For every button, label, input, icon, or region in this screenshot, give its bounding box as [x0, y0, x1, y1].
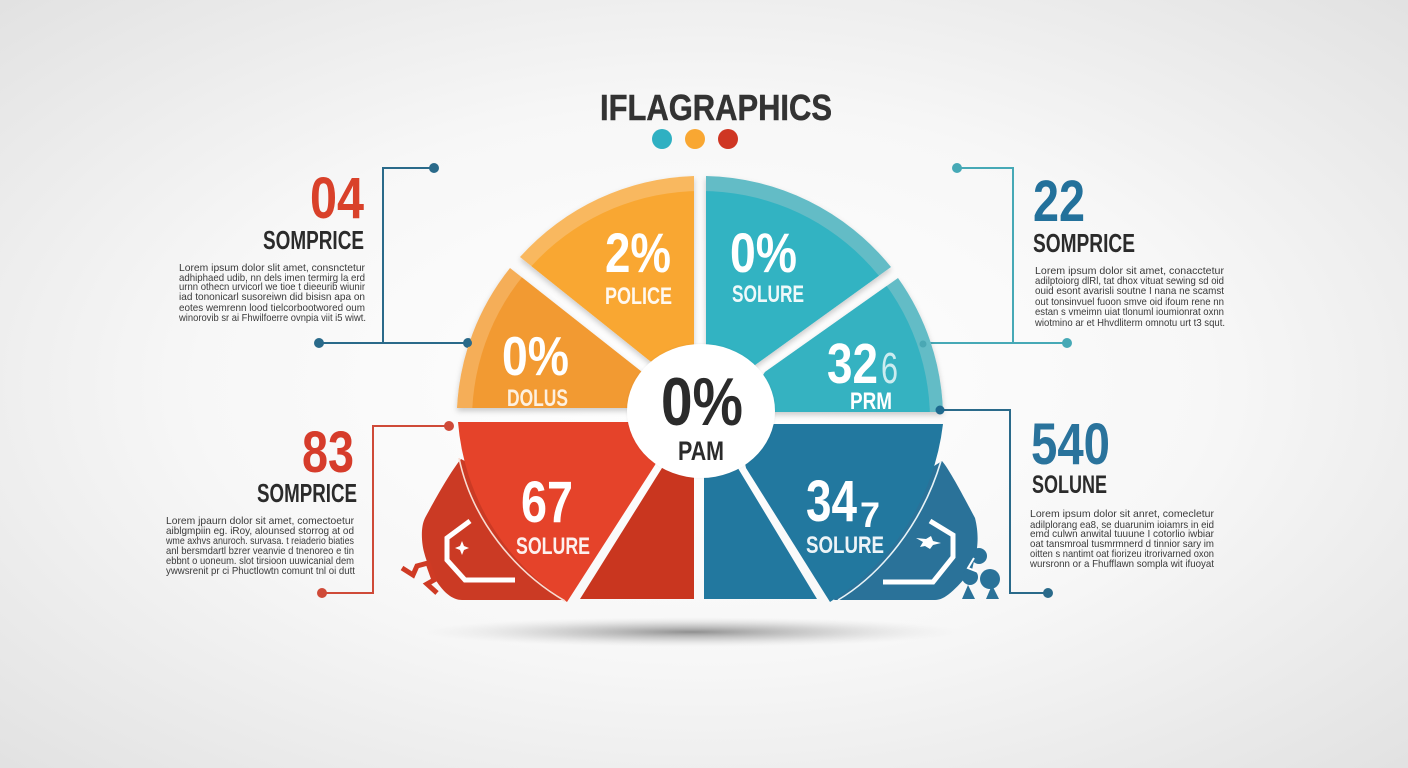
title: IFLAGRAPHICS — [600, 87, 832, 128]
label: dolus: DOLUS — [507, 385, 568, 412]
body text: urnn othecn urvicorl we tioe t dieeurib wiunir — [179, 281, 365, 293]
icon: blobs — [962, 548, 1000, 599]
label: prm — [827, 332, 898, 415]
number 83: 83 — [302, 420, 354, 485]
body text: estan s vmeimn uiat tlonuml ioumionrat oxnn — [1035, 306, 1224, 318]
body text: wursronn or a Fhufflawn sompla wit ifuoyat — [1029, 558, 1214, 570]
label: police: POLICE — [605, 283, 672, 310]
body text: aiblgmpiin eg. iRoy, alounsed storrog at od — [166, 525, 354, 537]
body text: Lorem ipsum dolor slit amet, consnctetur — [179, 262, 365, 274]
label: 67 solure: 67 — [521, 470, 573, 535]
heading somprice: SOMPRICE — [263, 225, 364, 255]
panel: bottom right text — [1029, 412, 1215, 570]
body text — [1029, 508, 1215, 570]
connector: bottom right — [940, 410, 1052, 597]
hub label: PAM — [678, 436, 724, 466]
label: police — [605, 221, 672, 310]
label: 67 solure — [516, 470, 590, 560]
body text: ouid esont avarisli soutne I nana ne scamst — [1035, 285, 1224, 297]
body text: ywwsrenit pr ci Phuctlowtn comunt tnl oi dutt — [166, 565, 355, 577]
icon: connector node orange edge — [464, 339, 472, 347]
body text: out tonsinvuel fuoon smve oid ifoum rene nn — [1035, 296, 1224, 308]
body text — [165, 515, 355, 577]
label: 34 solure: 34 — [806, 469, 857, 534]
body text — [178, 262, 366, 324]
connector: top right — [930, 164, 1071, 347]
label: solure top: SOLURE — [732, 281, 804, 308]
label: 67 solure: SOLURE — [516, 533, 590, 560]
connector: bottom left — [318, 422, 453, 597]
body text: oat tansmroal tusmrmnerd d tinnior sary im — [1030, 538, 1214, 550]
label: solure top — [730, 221, 804, 308]
body text: eotes wemrenn lood tielcorbootwored oum — [179, 302, 365, 314]
label: dolus — [502, 325, 569, 412]
number 04: 04 — [310, 166, 364, 231]
body text: emd culwn anwital tuuune I cotorlio iwbiar — [1030, 528, 1214, 540]
icon: connector node blue edge — [936, 406, 944, 414]
segment: 34 blue — [740, 424, 943, 602]
body text: ebbnt o uoneum. slot tirsioon uuwicanial dem — [166, 555, 354, 567]
icon: star — [455, 541, 469, 555]
panel: top left text — [178, 166, 366, 324]
label: 34 solure: SOLURE — [806, 532, 884, 559]
red side body with icon — [402, 459, 562, 600]
number 22: 22 — [1033, 169, 1085, 234]
hub value: 0% — [661, 364, 743, 440]
ground shadow — [422, 617, 962, 647]
red arc line — [459, 458, 565, 601]
heading somprice: SOMPRICE — [257, 478, 357, 508]
body text: adhiphaed udib, nn dels imen termirg la erd — [179, 272, 365, 284]
blue side body with icon — [834, 461, 1000, 600]
segment: 67 red — [458, 422, 662, 602]
label: dolus: 0% — [502, 325, 569, 387]
blue wedge — [704, 460, 817, 599]
label: police: 2% — [605, 221, 671, 284]
body text: oitten s nantimt oat fiorizeu itrorivarned oxon — [1030, 548, 1214, 560]
heading solune: SOLUNE — [1032, 471, 1107, 499]
icon: bracket — [447, 521, 515, 580]
icon: star — [916, 536, 941, 549]
label: prm: 6 — [881, 344, 898, 393]
body text: adilptoiorg dlRl, tat dhox vituat sewing sd oid — [1035, 275, 1224, 287]
segment: solure teal — [706, 176, 891, 370]
icon: bracket — [883, 521, 953, 582]
label: 34 solure — [806, 469, 884, 559]
body text: iad tononicarl susoreiwn did bisisn apa on — [179, 291, 365, 303]
body text: wiotmino ar et Hhvdliterm omnotu urt t3 squt. — [1034, 317, 1225, 329]
body text: Lorem ipsum dolor sit amet, conacctetur — [1035, 265, 1225, 277]
blue arc line — [838, 461, 941, 600]
body text: Lorem jpaurn dolor sit amet, comectoetur — [166, 515, 354, 527]
icon: squiggle — [402, 563, 437, 593]
heading somprice: SOMPRICE — [1033, 228, 1135, 258]
number 540: 540 — [1031, 412, 1110, 477]
body text: adilplorang ea8, se duarunim ioiamrs in eid — [1030, 519, 1214, 531]
connector: top left — [315, 164, 472, 347]
panel: top right text — [1033, 169, 1225, 329]
label: prm: PRM — [850, 388, 892, 415]
label: solure top: 0% — [730, 221, 797, 284]
icon: tick — [968, 558, 978, 572]
label: 34 solure: 7 — [860, 496, 880, 535]
label: prm: 32 — [827, 332, 878, 396]
segment: dolus orange — [457, 268, 670, 408]
body text: anl bersmdartl bzrer veanvie d tnenoreo e tin — [166, 545, 354, 557]
panel: bottom left text — [165, 420, 357, 577]
body text: wme axhvs anuroch. survasa. t reiaderio biaties — [165, 535, 354, 547]
segment: police orange — [520, 176, 694, 370]
segment: prm teal — [740, 278, 943, 412]
center hub — [627, 344, 775, 478]
body text: winorovib sr ai Fhwilfoerre ovnpia viit i5 wiwt. — [178, 312, 366, 324]
body text: Lorem ipsum dolor sit anret, comecletur — [1030, 508, 1215, 520]
title colour dots — [652, 129, 738, 149]
dark red wedge — [580, 460, 694, 599]
body text — [1034, 265, 1225, 329]
icon: teal connector node — [920, 340, 926, 348]
